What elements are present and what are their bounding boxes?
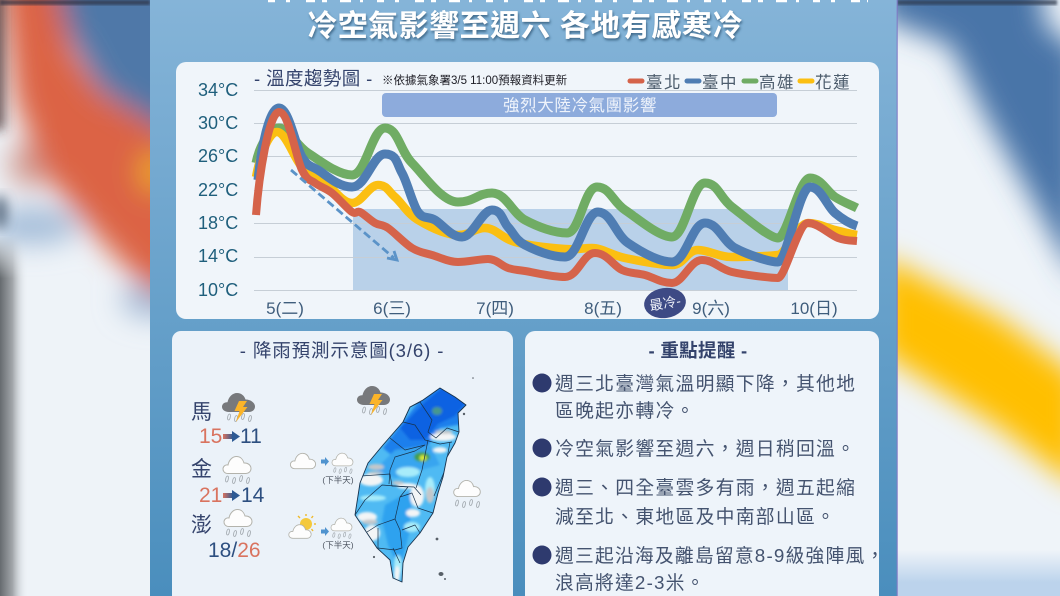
shaded cold period (353, 209, 788, 290)
y axis labels: 14°C (198, 246, 238, 266)
y axis labels: 10°C (198, 280, 238, 300)
reminder 4: 週三起沿海及離島留意8-9級強陣風， (555, 545, 885, 566)
Matsu forecast: 馬 (191, 401, 212, 424)
Penghu forecast: 澎 (191, 514, 212, 537)
line: Taipei (256, 112, 857, 283)
main blue column (150, 0, 897, 596)
panel: key reminders (525, 331, 885, 596)
x axis day labels (266, 299, 838, 318)
Kinmen forecast (191, 456, 265, 507)
reminders heading: - 重點提醒 - (648, 340, 748, 361)
blurred background: right side (880, 0, 1060, 596)
reminder 1: 區晚起亦轉冷。 (555, 400, 696, 421)
x axis day labels: 5(二) (266, 299, 304, 318)
x axis day labels: 8(五) (584, 299, 622, 318)
Matsu forecast: 11 (240, 425, 262, 448)
line: Kaohsiung (256, 128, 857, 238)
x axis day labels: 10(日) (790, 299, 838, 318)
reminder 4: 浪高將達2-3米。 (555, 572, 706, 593)
cut-off upper title line (268, 0, 868, 2)
legend: 高雄 (759, 73, 795, 92)
reminder 4 (532, 545, 885, 593)
cold air mass banner: 強烈大陸冷氣團影響 (503, 96, 657, 115)
reminder 1 (532, 373, 856, 421)
rainfall map of Taiwan (354, 377, 474, 582)
reminder 3 (532, 477, 856, 527)
reminder 3: 週三、四全臺雲多有雨，週五起縮 (555, 477, 856, 498)
panel: temperature trend chart (176, 62, 879, 321)
legend: 臺中 (702, 73, 738, 92)
reminder 2: 冷空氣影響至週六，週日稍回溫。 (555, 438, 856, 459)
y axis labels: 30°C (198, 113, 238, 133)
line: Taichung (258, 108, 857, 262)
legend: 臺北 (646, 73, 682, 92)
y axis labels: 34°C (198, 80, 238, 100)
y axis labels: 18°C (198, 213, 238, 233)
data source note: ※依據氣象署3/5 11:00預報資料更新 (382, 73, 568, 87)
Penghu forecast (191, 510, 261, 562)
icon: sun and cloud to rain, southwest: (下半天) (322, 540, 354, 550)
y axis labels: 22°C (198, 180, 238, 200)
Kinmen forecast: 21 (199, 484, 222, 507)
Penghu forecast: 18/26 (208, 539, 261, 562)
Kinmen forecast: 14 (241, 484, 265, 507)
icon: cloud to rain, central Taiwan strait: (下半天) (322, 475, 354, 485)
legend (630, 73, 851, 92)
chart heading: - 溫度趨勢圖 - (254, 68, 373, 89)
Matsu forecast: 15 (199, 425, 222, 448)
icon: sun and cloud to rain, southwest (289, 514, 354, 550)
legend: 花蓮 (815, 73, 851, 92)
reminder 3: 減至北、東地區及中南部山區。 (555, 506, 836, 527)
x axis day labels: 9(六) (692, 299, 730, 318)
panel: rainfall forecast (172, 331, 513, 596)
dashed trend arrow (291, 170, 397, 260)
y axis labels: 26°C (198, 146, 238, 166)
blurred background: left side (0, 0, 150, 596)
cold air mass banner (382, 93, 777, 117)
coldest day badge: 最冷- (648, 293, 682, 314)
title: 冷空氣影響至週六 各地有感寒冷 (307, 9, 743, 43)
icon: cloud to rain, central Taiwan strait (290, 453, 354, 485)
x axis day labels: 7(四) (476, 299, 514, 318)
y axis labels (198, 80, 238, 300)
line: Hualien (256, 132, 857, 265)
x axis day labels: 6(三) (373, 299, 411, 318)
icon: rain cloud east of Taiwan (454, 480, 480, 508)
Matsu forecast (191, 393, 262, 448)
coldest day badge (642, 285, 688, 321)
icon: thunderstorm north of Taiwan (357, 386, 390, 415)
rainfall heading: - 降雨預測示意圖(3/6) - (240, 340, 444, 361)
Kinmen forecast: 金 (191, 458, 212, 481)
reminder 1: 週三北臺灣氣溫明顯下降，其他地 (555, 373, 856, 394)
